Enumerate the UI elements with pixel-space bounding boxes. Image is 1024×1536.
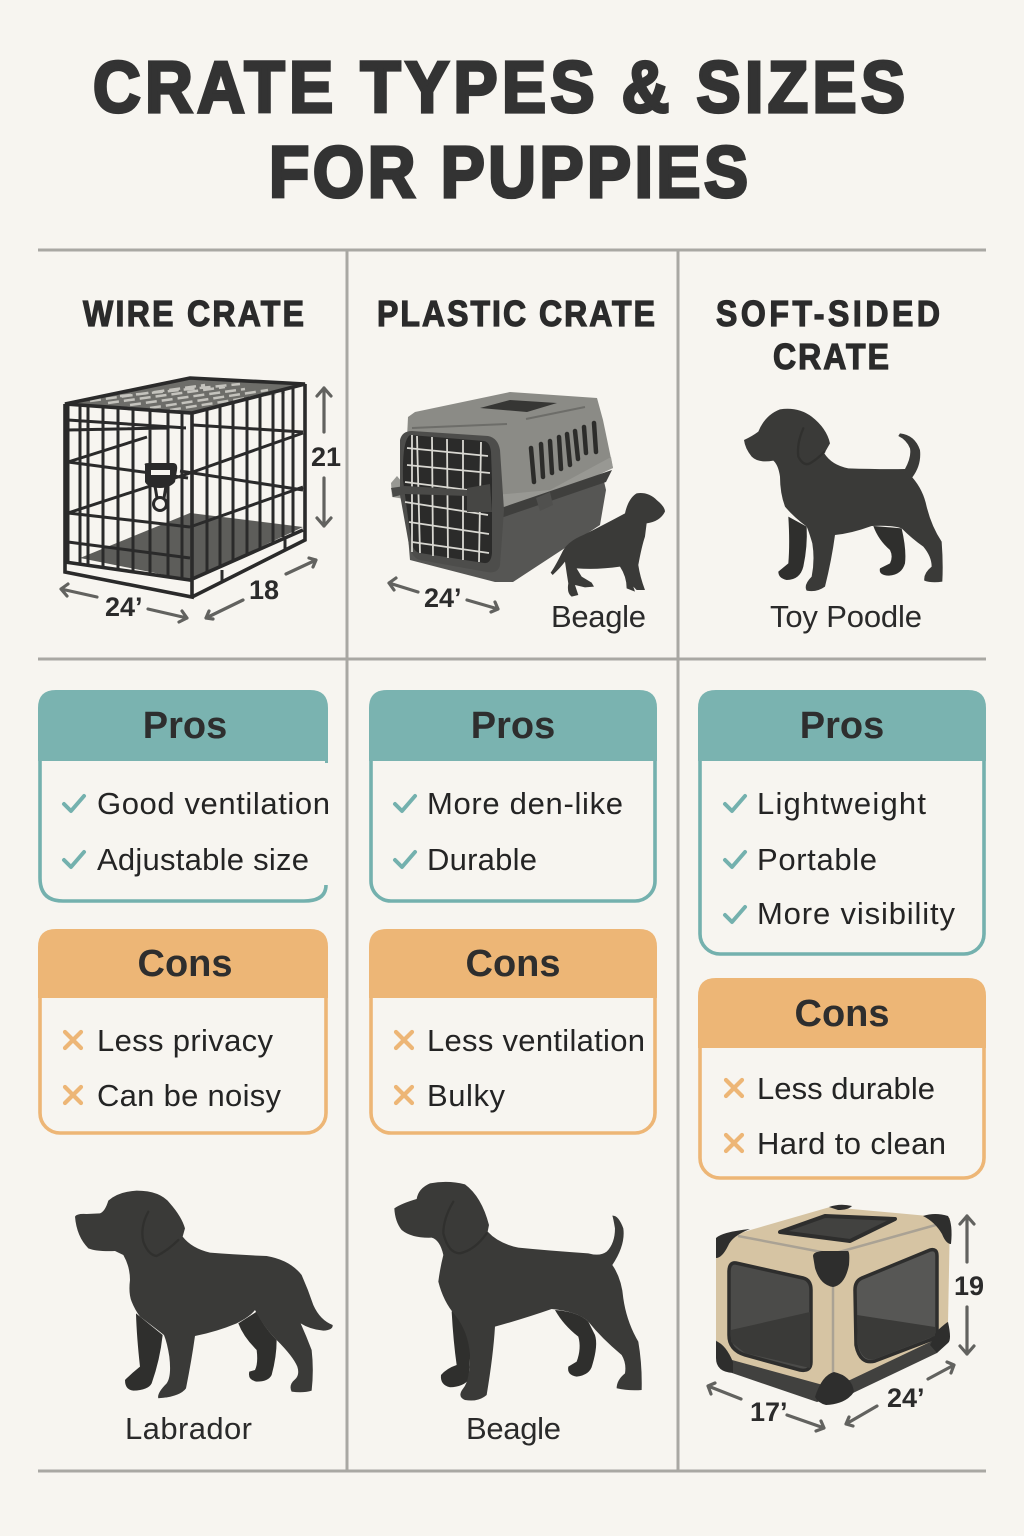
dimension: soft crate width 17: [708, 1383, 824, 1431]
label: toy poodle: Toy Poodle: [770, 599, 922, 634]
heading: soft-sided crate: CRATE: [773, 337, 889, 377]
heading: pros: Pros: [800, 705, 884, 747]
heading: cons: Cons: [794, 993, 890, 1035]
icon: toy poodle silhouette: [744, 409, 943, 591]
dimension: plastic crate width 24: [389, 578, 498, 613]
list item: hard to clean: Hard to clean: [757, 1126, 946, 1161]
list item: bulky: Bulky: [427, 1078, 506, 1113]
list item: less durable: Less durable: [757, 1071, 935, 1106]
dimension: wire crate width 24: 24’: [105, 592, 143, 622]
illustration: plastic crate: [391, 392, 613, 582]
label: beagle: Beagle: [551, 599, 646, 634]
list item: portable: Portable: [757, 842, 877, 877]
panel: plastic crate pros: [369, 690, 657, 901]
dimension: soft crate height 19: [954, 1216, 984, 1354]
icon: beagle silhouette: [394, 1182, 642, 1401]
heading: plastic crate: PLASTIC CRATE: [377, 294, 655, 334]
list item: good ventilation: Good ventilation: [97, 786, 330, 821]
dimension: soft crate depth 24: 24’: [887, 1383, 925, 1413]
label: beagle: Beagle: [466, 1411, 561, 1446]
dimension: wire crate height 21: [311, 388, 341, 526]
dimension: wire crate depth 18: 18: [249, 575, 279, 605]
dimension: plastic crate width 24: 24’: [424, 583, 462, 613]
icon: small beagle silhouette: [551, 493, 665, 597]
label: labrador: Labrador: [125, 1411, 252, 1446]
list item: more den-like: More den-like: [427, 786, 623, 821]
panel: wire crate cons: [38, 929, 328, 1133]
title: FOR PUPPIES: [269, 131, 748, 213]
dimension: soft crate height 19: 19: [954, 1271, 984, 1301]
dimension: soft crate depth 24: [846, 1362, 954, 1426]
dimension: wire crate height 21: 21: [311, 442, 341, 472]
heading: cons: Cons: [138, 943, 232, 985]
heading: pros: Pros: [143, 705, 227, 747]
heading: wire crate: WIRE CRATE: [83, 294, 304, 334]
list item: adjustable size: Adjustable size: [97, 842, 309, 877]
title: CRATE TYPES & SIZES: [93, 46, 905, 128]
list item: less ventilation: Less ventilation: [427, 1023, 645, 1058]
heading: pros: Pros: [471, 705, 555, 747]
dimension: wire crate depth 18: [206, 558, 316, 619]
panel: wire crate pros: [38, 690, 330, 901]
heading: soft-sided crate: [716, 294, 940, 377]
heading: soft-sided crate: SOFT-SIDED: [716, 294, 940, 334]
panel: soft-sided crate cons: [698, 978, 986, 1178]
title: [93, 46, 905, 213]
list item: less privacy: Less privacy: [97, 1023, 274, 1058]
list item: lightweight: Lightweight: [757, 786, 926, 821]
dimension: wire crate width 24: [61, 584, 187, 622]
illustration: wire crate: [65, 378, 305, 597]
dimension: soft crate width 17: 17’: [750, 1397, 788, 1427]
panel: plastic crate cons: [369, 929, 657, 1133]
list item: more visibility: More visibility: [757, 896, 956, 931]
icon: labrador silhouette: [75, 1191, 333, 1398]
list item: durable: Durable: [427, 842, 537, 877]
list item: can be noisy: Can be noisy: [97, 1078, 282, 1113]
heading: cons: Cons: [466, 943, 560, 985]
illustration: soft-sided crate: [716, 1205, 952, 1405]
panel: soft-sided crate pros: [698, 690, 986, 954]
